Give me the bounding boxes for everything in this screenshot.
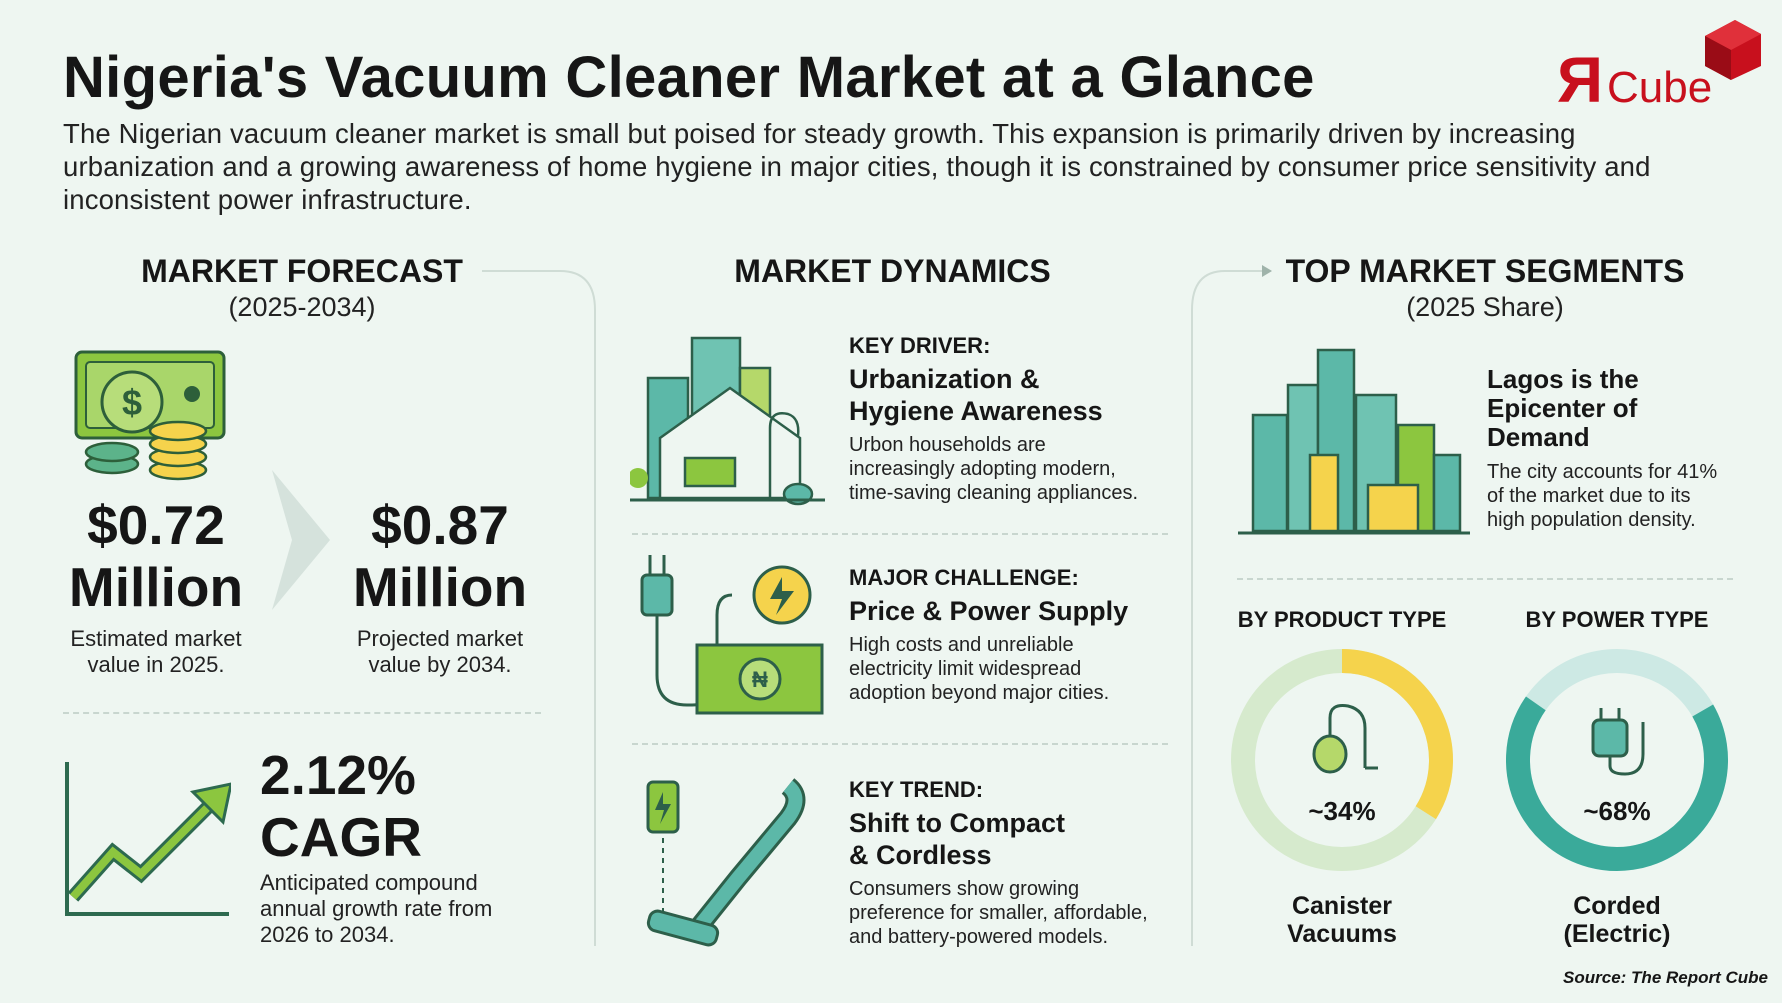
stat 2034: Million [353,556,527,618]
text: lagos: Epicenter of [1487,393,1637,423]
panel: top market segments [1231,253,1733,948]
stat CAGR: CAGR [260,806,422,868]
subtitle [63,118,1651,215]
sub heading: (2025-2034) [228,292,376,322]
sub heading: (2025 Share) [1406,292,1564,322]
stat 2034: $0.87 [371,494,509,556]
text: key trend [849,777,1148,948]
text: key trend: & Cordless [849,840,992,870]
stat 2025: value in 2025. [88,652,224,677]
title: Nigeria's Vacuum Cleaner Market at a Glance [63,45,1315,110]
text: lagos [1487,364,1717,531]
chart: by product type: BY PRODUCT TYPE [1238,607,1446,632]
text: major challenge: electricity limit widespread [849,658,1081,680]
icon: cordless vacuum [646,778,806,946]
text: lagos: The city accounts for 41% [1487,461,1717,483]
chart: by power type [1506,607,1728,948]
icon: plug and cash [640,555,824,714]
stat CAGR [260,744,492,947]
heading: MARKET FORECAST [141,253,463,289]
text: key trend: Shift to Compact [849,808,1065,838]
source: Source: The Report Cube [1563,968,1768,987]
arrow [272,470,330,610]
text: key trend: and battery-powered models. [849,926,1108,948]
icon: city [1238,348,1470,534]
chart: by product type: Canister [1292,892,1392,920]
text: major challenge: adoption beyond major cities. [849,682,1109,704]
subtitle: The Nigerian vacuum cleaner market is small but poised for steady growth. This expansion is primarily driven by increasing [63,118,1576,149]
chart: by power type: ~68% [1583,796,1651,826]
text: lagos: Lagos is the [1487,364,1639,394]
stat 2025: Estimated market [70,626,242,651]
text: key trend: KEY TREND: [849,777,983,802]
row: major challenge [640,555,1128,714]
logo [1557,20,1761,110]
icon: plug and cash: ₦ [752,667,768,692]
stat 2025 [69,494,243,677]
icon: money: $ [122,382,142,423]
text: major challenge [849,565,1128,704]
icon: city home [630,336,825,506]
row: key trend [646,777,1148,948]
text: lagos: of the market due to its [1487,485,1690,507]
chart: by power type: (Electric) [1564,920,1670,948]
text: key trend: Consumers show growing [849,878,1079,900]
stat CAGR: Anticipated compound [260,870,478,895]
stat 2034 [353,494,527,677]
heading: TOP MARKET SEGMENTS [1286,253,1684,289]
text: key driver: Hygiene Awareness [849,396,1103,426]
icon: money [74,350,226,480]
text: key driver: time-saving cleaning appliances. [849,482,1138,504]
chart: by product type [1231,607,1453,948]
icon: growth chart [65,762,231,916]
chart: by product type: ~34% [1308,796,1376,826]
heading: MARKET DYNAMICS [734,253,1051,289]
stat 2034: value by 2034. [368,652,512,677]
text: major challenge: High costs and unreliable [849,634,1074,656]
text: key driver: Urbanization & [849,364,1040,394]
text: key driver [849,333,1138,504]
text: lagos: high population density. [1487,509,1696,531]
text: key driver: Urbon households are [849,434,1046,456]
stat 2034: Projected market [357,626,523,651]
stat CAGR: 2026 to 2034. [260,922,395,947]
stat CAGR: 2.12% [260,744,416,806]
text: major challenge: MAJOR CHALLENGE: [849,565,1079,590]
chart: by product type: Vacuums [1287,920,1397,948]
text: lagos: Demand [1487,422,1590,452]
stat CAGR: annual growth rate from [260,896,492,921]
subtitle: urbanization and a growing awareness of home hygiene in major cities, though it is constrained by consumer price sensitivity and [63,151,1651,182]
stat 2025: Million [69,556,243,618]
row: key driver [630,333,1138,506]
chart: by power type: Corded [1573,892,1661,920]
text: major challenge: Price & Power Supply [849,596,1128,626]
panel: market dynamics [630,253,1168,948]
stat 2025: $0.72 [87,494,225,556]
text: key driver: KEY DRIVER: [849,333,990,358]
text: key trend: preference for smaller, affordable, [849,902,1148,924]
subtitle: inconsistent power infrastructure. [63,184,472,215]
panel: market forecast [63,253,541,947]
text: key driver: increasingly adopting modern, [849,458,1116,480]
chart: by power type: BY POWER TYPE [1526,607,1708,632]
